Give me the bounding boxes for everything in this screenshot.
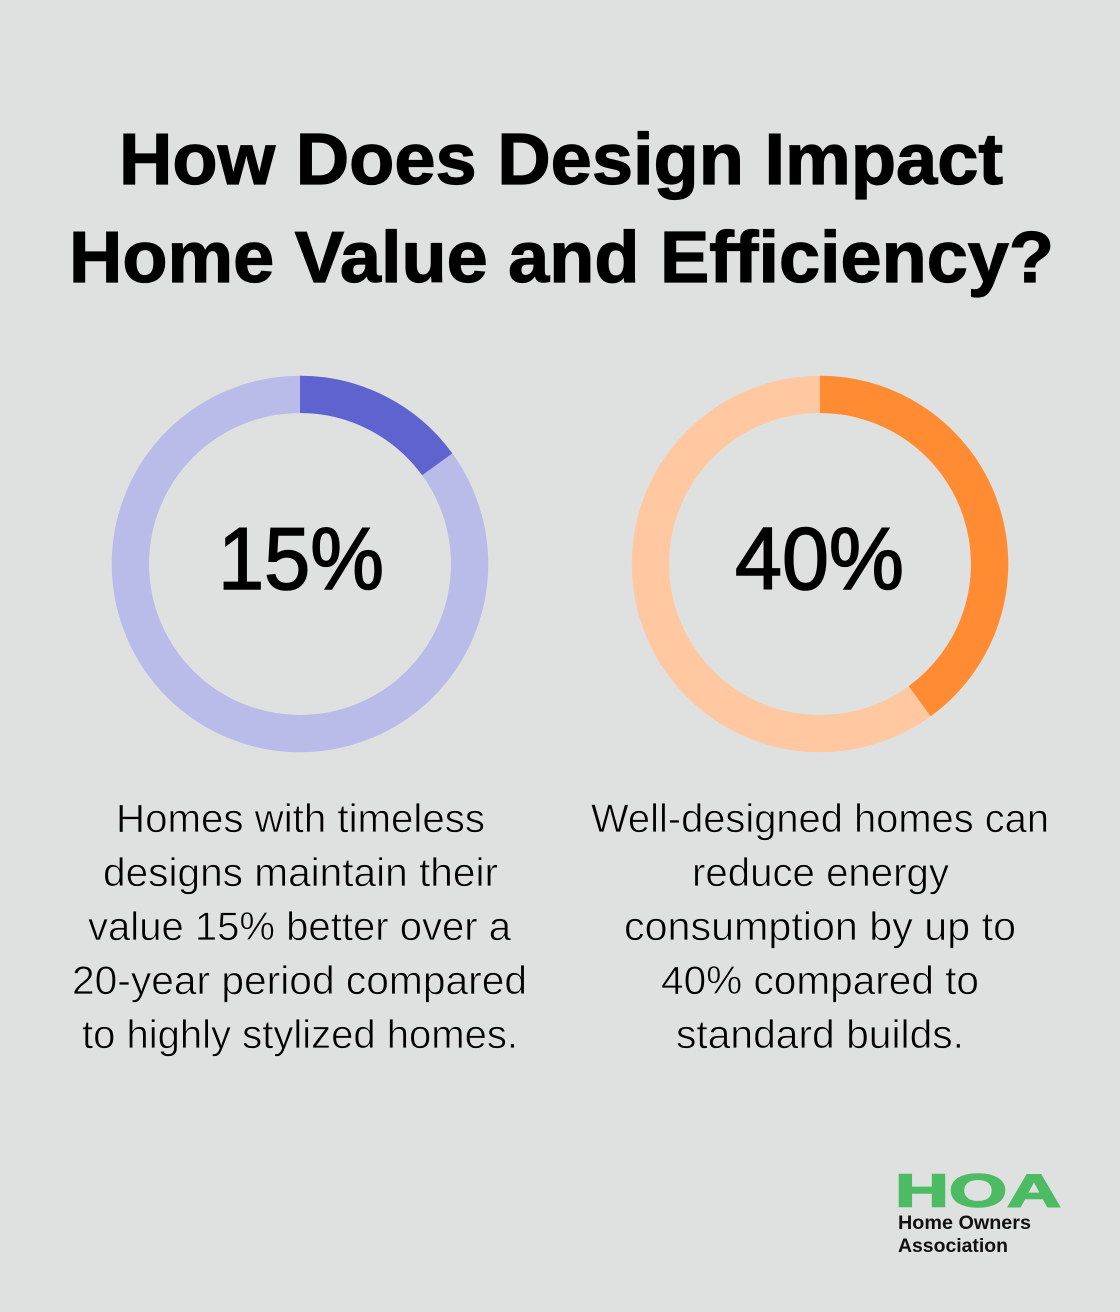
description: energy consumption: 40% compared to [661, 959, 979, 1003]
donut chart: 15% [130, 394, 470, 734]
title: How Does Design Impact [119, 120, 1003, 200]
title: Home Value and Efficiency? [69, 218, 1054, 298]
panel: home value stat [72, 394, 527, 1057]
logo: HOA Home Owners Association [895, 1164, 1061, 1257]
description: home value: value 15% better over a [88, 905, 512, 949]
description: home value: Homes with timeless [116, 797, 485, 841]
title [69, 120, 1054, 298]
donut chart: 40% [650, 394, 990, 734]
description: energy consumption: reduce energy [692, 851, 949, 895]
logo: HOA Home Owners Association: Home Owners [898, 1213, 1031, 1234]
panel: energy efficiency stat [591, 394, 1049, 1057]
value: 40%: 40% [735, 509, 904, 608]
description: home value: 20-year period compared [72, 959, 527, 1003]
description: energy consumption: Well-designed homes can [591, 797, 1049, 841]
value: 15%: 15% [218, 509, 384, 608]
description: energy consumption [591, 797, 1049, 1057]
description: home value: designs maintain their [103, 851, 498, 895]
description: energy consumption: consumption by up to [624, 905, 1016, 949]
description: home value [72, 797, 527, 1057]
description: energy consumption: standard builds. [676, 1013, 964, 1057]
description: home value: to highly stylized homes. [82, 1013, 518, 1057]
logo: HOA Home Owners Association: Association [898, 1236, 1008, 1257]
logo: HOA Home Owners Association: HOA [895, 1164, 1061, 1216]
